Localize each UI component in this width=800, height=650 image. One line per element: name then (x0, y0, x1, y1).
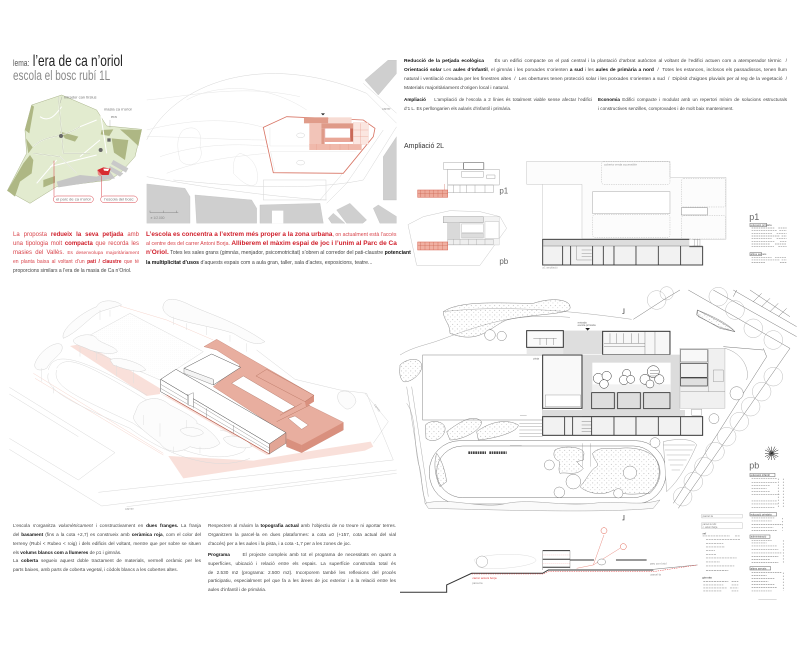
text: ecological footprint: Materials majoritàriament d’origen local i natural. (404, 86, 509, 90)
text: volumetric organisation: els volums blancs com a llumeres de p1 i gimnàs. (13, 550, 121, 555)
text: topography and programme: Respectem al màxim la topografia actual amb l’objectiu de no treure ni aportar terres. (208, 523, 396, 528)
text: school location: L’escola es concentra a l’extrem més proper a la zona urbana, on actualment està l’accés (146, 231, 396, 238)
text: ecological footprint: d’1 L. Es perllongarien els aularis d’infantil i primària. (404, 106, 511, 111)
pink ground strips (70, 343, 373, 478)
extension 2L small plans and first floor: coberta verda accessible (604, 162, 637, 166)
text: volumetric organisation: L’escola s’organitza volumètricament i constructivament en dues franges. La franja (13, 523, 201, 528)
text: ecological footprint: Ampliació L’ampliació de l’escola a 2 línies és totalment viable sense afectar l’edifici (404, 97, 592, 102)
site location map: era (111, 114, 118, 119)
white classroom volume (161, 369, 286, 444)
ground floor legends: parcel·la rubí (703, 523, 717, 526)
text: volumetric organisation: terreny (Rubí < Rubeo < roig) i dels edificis del voltant, mentre que per sobre se situen (13, 541, 201, 546)
text: proposal intro: masies del Vallès. Es desenvolupa majoritàriament (13, 250, 139, 256)
ground floor legends: educació primària (751, 512, 772, 516)
text: topography and programme (208, 523, 396, 592)
site plan with school footprint in red: e 1/2.000 (151, 216, 165, 220)
site location map: masia ca n'oriol (104, 107, 132, 112)
first floor legend: p1 (749, 212, 759, 222)
site location map: el parc de ca n'oriol (56, 197, 91, 202)
text: ecological footprint: Reducció de la petjada ecològica És un edifici compacte on el pati central i la plantació d’arbrat autòcton al voltant de l’edifici actuen com a atemperador tèrmic / (404, 59, 787, 64)
section drawing: parcel·la (651, 572, 661, 576)
ground floor plan: pista (533, 356, 539, 360)
section drawing: parcel·la (472, 581, 483, 585)
text: proposal intro: una tipologia molt compacta que recorda les (13, 241, 139, 247)
courtyards (232, 376, 295, 413)
text: school location: la multiplicitat d’usos d’aquests espais com a aula gran, taller, sala d’actes, exposicions, teatre... (146, 260, 372, 266)
site location map (7, 95, 142, 203)
title: escola el bosc rubí 1L (13, 68, 110, 83)
title: lema: l’era de ca n’oriol (13, 53, 123, 70)
heading: extension 2L: Ampliació 2L (404, 143, 444, 150)
ground floor legends: administració (751, 535, 767, 539)
text: topography and programme: Programa El projecte compleix amb tot el programa de necessitats en quant a (208, 552, 396, 557)
first floor legend: altres serveis (751, 252, 767, 256)
red lower roof (204, 339, 343, 453)
section drawing (400, 528, 697, 592)
sports field (423, 355, 543, 420)
first floor legend: educació primària (751, 223, 772, 227)
ground floor plan (400, 287, 797, 599)
extension 2L small plans and first floor: pb (499, 257, 509, 266)
axonometric view of the school (9, 299, 397, 511)
text: school location (146, 231, 411, 266)
planted areas (400, 300, 735, 494)
site location map: l'escola del bosc (104, 197, 134, 202)
pb small diagram (408, 211, 507, 265)
ground floor legends: gimnàs (702, 575, 712, 579)
p1 small diagram (443, 163, 499, 193)
text: ecological footprint (404, 58, 787, 111)
text: volumetric organisation: La coberta segueix aquest doble tractament de materials, vermell ceràmic per les (13, 558, 201, 563)
text: ecological footprint: Orientació solar Les aules d’infantil, el gimnàs i les porxades s’orienten a sud i les aules de primària a nord / Totes les estances, inclosos els passadissos, tenen llum (404, 68, 787, 73)
section drawing: parc ca n'oriol (650, 562, 667, 566)
site location map: mirador can tirsius (64, 95, 97, 100)
trees (35, 299, 356, 451)
text: topography and programme: Organitzem la parcel·la en dues plataformes: a cota ±0 (+157, cota actual del vial (208, 532, 396, 537)
text: ecological footprint: i constructives senzilles, comprovades i de molt baix manteniment. (598, 106, 734, 111)
sports field and track (48, 313, 250, 463)
text: proposal intro: en planta baixa al voltant d’un pati / claustre que té (13, 259, 139, 265)
text: volumetric organisation: parts baixes, amb parts de coberta vegetal, i còdols blancs a les cobertes altes. (13, 567, 178, 572)
ground floor plan: entrada (578, 320, 587, 324)
first floor plan with extension (527, 161, 726, 239)
axonometric view of the school: carrer (125, 507, 135, 511)
white gym volume (184, 354, 241, 385)
extension 2L small plans and first floor (408, 161, 726, 269)
text: volumetric organisation: del basament (fins a la cota +2,7) es construeix amb ceràmica roja, com el color del (13, 532, 201, 537)
text: proposal intro (13, 232, 139, 274)
ground floor legends: educació infantil (751, 473, 770, 477)
extension 2L small plans and first floor: p1 (499, 186, 509, 195)
ground floor plan: escola primària (578, 323, 596, 327)
first floor legend (749, 212, 787, 263)
building floor plan (527, 331, 670, 354)
text: school location: al centre des del carrer Antoni Borja. Alliberem el màxim espai de joc i l’unim al Parc de Ca (146, 240, 397, 247)
text: school location: n’Oriol. Totes les sales grans (gimnàs, menjador, psicomotricitat) s’obren al corredor del pati-claustre potenciant (146, 249, 411, 256)
roads and parking (400, 290, 797, 508)
track (429, 441, 666, 504)
text: topography and programme: participatiu, especialment pel que fa a les àrees de joc exterior i a la relació entre les (208, 578, 396, 583)
text: topography and programme: d’accés) per a les aules i la pista, i a cota -1,7 per a les zones de joc. (208, 541, 351, 546)
text: topography and programme: superfícies, ubicació i relació entre els espais. La superfície construïda total és (208, 561, 396, 566)
ground floor legends: ref (703, 532, 706, 536)
section drawing: carrer antoni borja (472, 576, 497, 580)
compass (765, 447, 778, 460)
text: volumetric organisation (13, 523, 201, 572)
ground floor legends (702, 473, 783, 599)
title (13, 53, 123, 83)
ground floor legends: altres serveis (751, 566, 767, 570)
ground floor legends: parcel·la (703, 514, 713, 518)
site plan with school footprint in red: carrer (382, 107, 392, 111)
text: ecological footprint: Economia Edifici compacte i modulat amb un repertori mínim de solucions estructurals (598, 97, 787, 102)
text: ecological footprint: natural i ventilació creuada per les finestres altes / Les obertures tenen protecció solar i les porxades s’orienten a sud / Dipòsit d’aigües pluvials per al reg de la vegetació / (404, 76, 787, 82)
text: proposal intro: La proposta redueix la seva petjada amb (13, 232, 139, 238)
text: topography and programme: de 2.530 m2 (programa: 2.500 m2). Incorporem també les reflexions del procés (208, 570, 396, 575)
section marks (622, 308, 624, 520)
text: topography and programme: aules d’infantil i de primària. (208, 587, 266, 592)
extension 2L small plans and first floor: p1 ampliació (543, 265, 558, 269)
site plan with school footprint in red (147, 60, 397, 224)
ground floor legends: c. antoni borja (703, 526, 718, 529)
ground floor plan: pb (749, 461, 759, 471)
text: proposal intro: proporcions similars a l’era de la masia de Ca n’Oriol. (13, 268, 131, 274)
axonometric view of the school: carrer (373, 403, 382, 413)
